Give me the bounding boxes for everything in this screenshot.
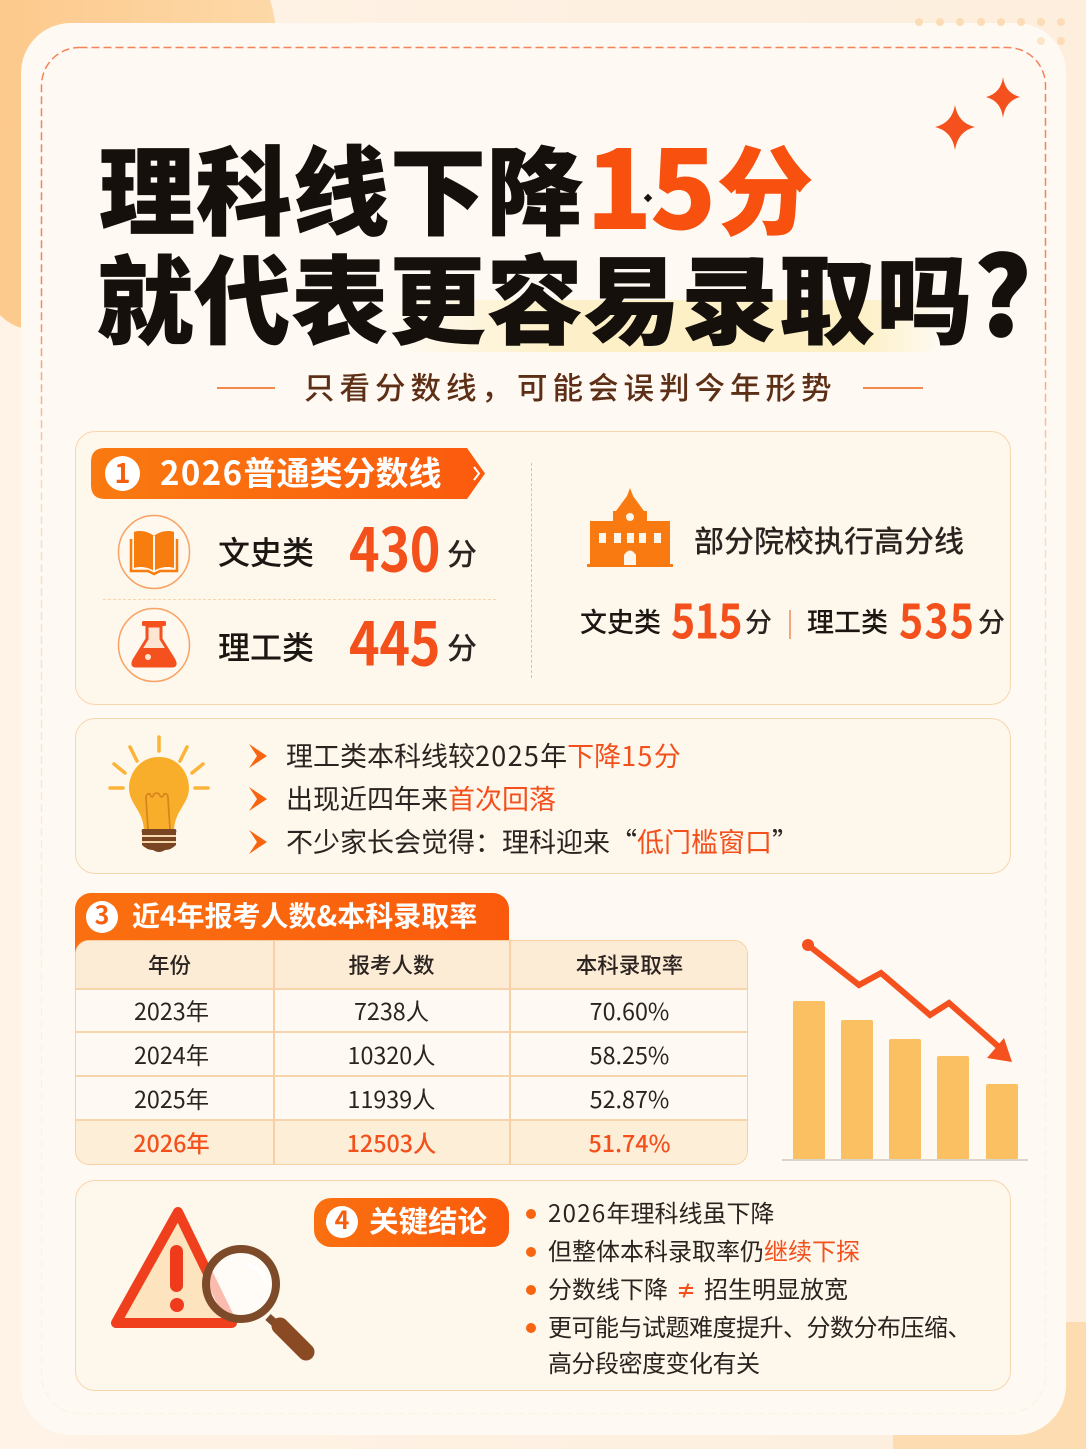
icon: light bulb [108,735,210,852]
digit 1: 1 [586,104,652,261]
item 4: 更可能与试题难度提升、分数分布压缩、 [548,1308,971,1343]
bullet 1: 理工类本科线较2025年下降15分 [286,735,681,774]
high score row: 文史类 [580,601,661,640]
data table: 年份 [148,949,191,980]
unit 分: 分 [717,116,813,255]
icon: sparkles [935,77,1020,150]
section 4 tag [314,1198,509,1247]
center divider [531,463,532,678]
label 文史类: 文史类 [218,528,314,574]
data table: 2023年 [134,993,209,1027]
item 4 [526,1308,971,1379]
table header row [76,941,749,989]
score 430: 430 [349,502,440,589]
highlight row [76,1120,749,1166]
data table: 本科录取率 [576,949,683,980]
unit 分: 分 [447,624,477,668]
data table [75,940,748,1165]
bullet 3: 不少家长会觉得：理科迎来“低门槛窗口” [286,821,799,860]
section 4 tag: 关键结论 [369,1199,487,1241]
high score row [580,583,1005,652]
chart: declining bars and arrow [782,939,1028,1161]
decorative dots [915,18,1065,45]
data table: 报考人数 [348,949,434,980]
data table: 51.74% [589,1125,670,1159]
title highlight brush [390,300,942,352]
item 1: 2026年理科线虽下降 [548,1194,774,1229]
icon: warning with magnifier [111,1207,314,1360]
conclusion list [526,1194,971,1379]
label 部分院校执行高分线: 部分院校执行高分线 [694,517,964,561]
title line 1: 理科线下降 [99,116,584,255]
section 1 tag: 1 [115,452,130,491]
high score row: 分 [745,601,772,640]
high score row: 分 [978,601,1005,640]
data table: 52.87% [590,1081,669,1115]
label 理工类: 理工类 [218,623,314,669]
panel: 2026 score lines [75,431,1011,705]
section 1 tag [91,447,485,499]
title [97,104,1033,368]
bullet 2: 出现近四年来首次回落 [286,778,556,817]
panel: key conclusion [75,1180,1011,1391]
small speck [644,194,652,202]
section 3 tag: 3 [95,896,109,932]
panel: key facts [75,718,1011,874]
data table: 2025年 [134,1081,209,1115]
icon: school [587,488,673,567]
icon: book [118,514,190,590]
section 3 tag: 近4年报考人数&本科录取率 [132,895,477,935]
score 445: 445 [349,596,440,683]
high score row: 535 [899,583,975,652]
icon: flask [118,608,190,682]
data table: 11939人 [348,1081,435,1115]
divider [103,599,496,600]
data table: 2026年 [133,1125,210,1159]
data table: 58.25% [590,1037,669,1071]
bullet list [249,735,799,860]
data table: 7238人 [354,993,429,1027]
section 3 tag [75,893,509,953]
item 4: 高分段密度变化有关 [548,1344,760,1379]
title line 2: 就代表更容易录取吗? [97,212,1033,368]
section 4 tag: 4 [335,1201,349,1237]
data table: 2024年 [134,1037,209,1071]
item 3: 分数线下降 招生明显放宽 [548,1270,848,1305]
subtitle: 只看分数线，可能会误判今年形势 [304,364,836,408]
digit 5: 5 [650,104,716,261]
item 2: 但整体本科录取率仍继续下探 [548,1232,860,1267]
data table: 10320人 [348,1037,435,1071]
data table: 70.60% [590,993,669,1027]
high score row: 理工类 [807,601,888,640]
high score row: 515 [671,583,742,652]
item 3: ≠ [676,1275,696,1304]
unit 分: 分 [447,530,477,574]
section 1 tag: 2026普通类分数线 [160,447,441,495]
data table: 12503人 [347,1125,436,1159]
